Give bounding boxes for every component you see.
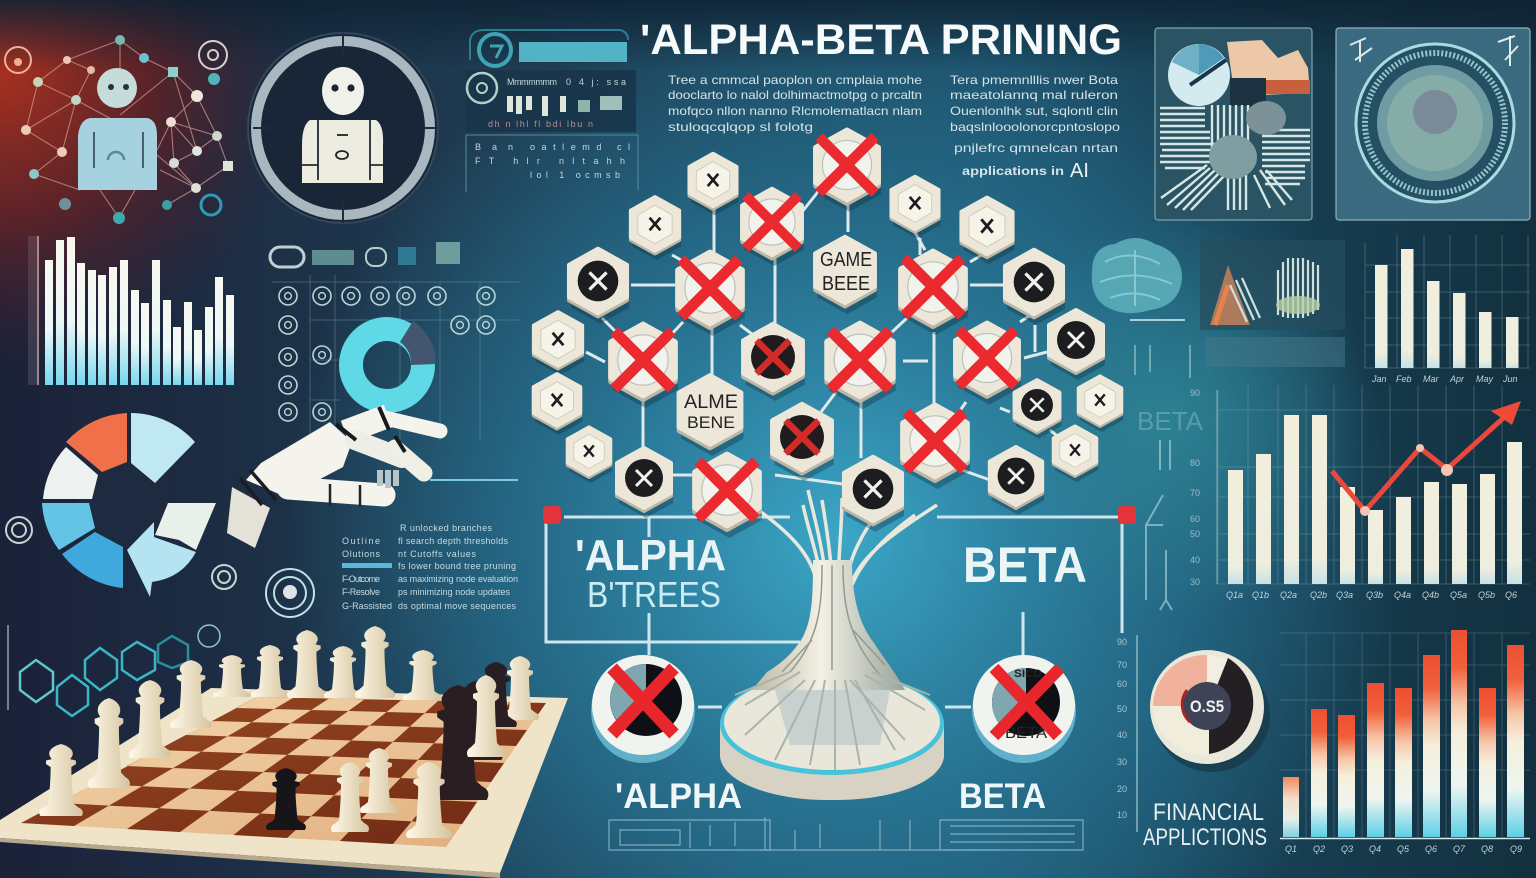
label: beta bottom: BETA — [959, 777, 1046, 816]
red connector markers — [543, 506, 1136, 524]
node — [1049, 310, 1105, 380]
axis labels: Q5b — [1478, 590, 1495, 600]
axis labels: Q3 — [1341, 844, 1353, 854]
axis labels: Feb — [1396, 374, 1412, 384]
axis labels: Q2a — [1280, 590, 1297, 600]
circle icons — [279, 287, 495, 421]
icon: small badges — [6, 517, 314, 617]
axis labels: May — [1476, 374, 1494, 384]
left side of mid-right chart: axis values: 90 — [1190, 388, 1200, 398]
tree base — [720, 670, 944, 800]
heading: financial applications: APPLICTIONS — [1143, 824, 1267, 851]
panel: top centre dashboard — [466, 30, 638, 192]
node — [901, 251, 968, 335]
dashboard labels: lol 1 ocmsb — [530, 170, 620, 180]
chart: segmented ring — [42, 413, 216, 597]
trend arrow — [1332, 401, 1521, 516]
axis labels: Mar — [1423, 374, 1440, 384]
node: alme bene: BENE — [687, 413, 735, 432]
schematic figure — [1146, 440, 1172, 610]
chess board — [0, 688, 568, 878]
dashboard labels: 0 4 j: ssa — [566, 77, 626, 87]
text block: left paragraph: mofqco nllon nanno Rlcmolematlacn nlam — [668, 104, 922, 118]
panel: robot network — [5, 35, 233, 224]
axis: financial scale: 30 — [1117, 757, 1127, 767]
axis labels: Q4a — [1394, 590, 1411, 600]
legend text block: F-Resolve — [342, 587, 380, 597]
legend text block: fs lower bound tree pruning — [398, 561, 516, 571]
text block: right paragraph: maeatolannq mal ruleron — [950, 88, 1118, 102]
legend text block: R unlocked branches — [400, 523, 492, 533]
dashboard labels: B a n — [475, 142, 513, 152]
bar chart: bottom right — [1280, 630, 1530, 854]
text block: right paragraph: Tera pmemnlllis nwer Bota — [950, 73, 1118, 87]
bar chart: top right — [1365, 235, 1530, 384]
legend text block: F-Outcome — [342, 574, 380, 584]
beta token — [972, 655, 1076, 763]
legend text block — [342, 523, 518, 611]
node — [743, 324, 805, 401]
circuit traces — [1160, 105, 1310, 210]
text block: right paragraph: Ouenlonlhk sut, sqlontl clin — [950, 104, 1118, 118]
mini bars — [507, 96, 622, 116]
axis labels: Q6 — [1425, 844, 1437, 854]
node — [567, 427, 612, 483]
legend text block: ds optimal move sequences — [398, 601, 516, 611]
dark pieces — [266, 662, 517, 830]
legend text block: fl search depth thresholds — [398, 536, 508, 546]
left side of mid-right chart: axis values: 50 — [1190, 529, 1200, 539]
axis: financial scale — [1117, 635, 1137, 832]
legend text block: Olutions — [342, 549, 380, 559]
trunk — [752, 560, 905, 690]
text block: right paragraph: applications in — [962, 164, 1064, 178]
legend text block: nt Cutoffs values — [398, 549, 476, 559]
axis: financial scale: 40 — [1117, 730, 1127, 740]
axis labels: Q1 — [1285, 844, 1297, 854]
node: game beee: GAME — [820, 249, 872, 271]
bracket lines — [546, 517, 1122, 707]
axis labels: Q6 — [1505, 590, 1517, 600]
node — [534, 312, 584, 375]
corner glyph marks — [1350, 36, 1518, 66]
label: alpha bottom: 'ALPHA — [615, 777, 742, 816]
node: alme bene: ALME — [684, 392, 738, 413]
front white pieces — [331, 675, 505, 838]
legend text block: G-Rassisted — [342, 601, 392, 611]
axis labels: Jun — [1502, 374, 1518, 384]
node — [891, 177, 941, 238]
node: game beee: BEEE — [822, 273, 870, 295]
dashboard labels: oatlemd cl — [530, 142, 630, 152]
label: beta: BETA — [963, 537, 1087, 593]
panel: icon grid — [270, 242, 520, 440]
robotic hand — [227, 407, 440, 548]
heading: financial applications: FINANCIAL — [1153, 799, 1264, 826]
axis: financial scale: 20 — [1117, 784, 1127, 794]
node — [689, 154, 739, 215]
panel: robot in ring — [248, 33, 438, 223]
bars — [1228, 415, 1522, 584]
peach blob — [1227, 40, 1310, 95]
axis labels: Q2b — [1310, 590, 1327, 600]
axis labels: Q4b — [1422, 590, 1439, 600]
axis labels: Q1b — [1252, 590, 1269, 600]
axis: financial scale: 60 — [1117, 679, 1127, 689]
icon: hexagon chain — [8, 625, 220, 716]
dashboard labels: dh n lhl fl bdi lbu n — [488, 119, 593, 129]
dashboard labels: FT hlr nltahh — [475, 156, 625, 166]
node — [1078, 376, 1123, 432]
gauge: O.S5 — [1190, 697, 1224, 716]
node — [1053, 426, 1098, 482]
panel: brain and sketches — [1092, 238, 1345, 378]
tree trunk and branches — [735, 490, 937, 770]
back row white pieces — [213, 626, 539, 720]
dashboard labels: Mmmmmmm — [507, 77, 557, 87]
axis labels: Q3a — [1336, 590, 1353, 600]
text block: right paragraph: baqslnlooolonorcpntoslopo — [950, 120, 1120, 134]
node — [611, 324, 678, 408]
left side of mid-right chart: axis values: 40 — [1190, 555, 1200, 565]
bar chart: middle right — [1218, 385, 1530, 600]
node: game beee — [815, 237, 877, 314]
axis labels: Q8 — [1481, 844, 1493, 854]
pie — [1168, 44, 1230, 106]
node — [631, 197, 681, 260]
axis labels: Q7 — [1453, 844, 1466, 854]
node — [827, 323, 896, 409]
legend text block: ps minimizing node updates — [398, 587, 510, 597]
gauge — [1150, 650, 1270, 772]
dashboard labels — [475, 77, 630, 180]
robot figure — [78, 68, 157, 190]
axis labels: Q4 — [1369, 844, 1381, 854]
axis labels: Q3b — [1366, 590, 1383, 600]
node — [569, 249, 629, 324]
game tree edges — [586, 188, 1062, 485]
bar chart: left — [28, 236, 234, 385]
chart: teal donut — [351, 321, 436, 401]
node — [772, 404, 834, 481]
icon: ring badges — [5, 41, 227, 215]
axis: financial scale: 70 — [1117, 660, 1127, 670]
node — [534, 374, 582, 435]
label: alpha b'trees — [575, 531, 726, 615]
node — [990, 447, 1044, 515]
axis labels: Jan — [1371, 374, 1387, 384]
alpha token — [591, 655, 695, 763]
node — [678, 252, 745, 336]
axis labels: Q5 — [1397, 844, 1410, 854]
axis labels — [1285, 844, 1522, 854]
panel: circuit image — [1155, 28, 1312, 220]
checker squares — [21, 697, 546, 844]
left side of mid-right chart: axis values: 70 — [1190, 488, 1200, 498]
node — [742, 189, 804, 266]
text block: left paragraph — [668, 73, 922, 134]
panel: circular seal — [1336, 28, 1530, 220]
legend text block: as maximizing node evaluation — [398, 574, 518, 584]
node — [815, 130, 881, 212]
axis labels: Apr — [1449, 374, 1465, 384]
beta token: SICD — [1014, 668, 1042, 680]
game tree nodes — [534, 130, 1123, 538]
legend text block: Outline — [342, 536, 380, 546]
left side of mid-right chart: axis values: 60 — [1190, 514, 1200, 524]
axis labels: Q1a — [1226, 590, 1243, 600]
text block: right paragraph: pnjlefrc qmnelcan nrtan — [954, 141, 1118, 155]
roots — [735, 672, 930, 770]
node — [695, 454, 762, 538]
node: alme bene — [679, 376, 743, 456]
robot figure — [302, 67, 383, 183]
axis: financial scale: 10 — [1117, 810, 1127, 820]
node cluster — [21, 35, 233, 224]
left side of mid-right chart: axis values: 80 — [1190, 458, 1200, 468]
node — [617, 448, 673, 518]
heading: financial applications — [1143, 799, 1267, 851]
label: alpha b'trees: 'ALPHA — [575, 531, 726, 580]
axis labels: Q5a — [1450, 590, 1467, 600]
text block: left paragraph: stuloqcqlqop sl folotg — [668, 120, 813, 134]
node — [961, 198, 1015, 264]
node — [1005, 250, 1065, 325]
axis labels: Q9 — [1510, 844, 1522, 854]
bars — [1283, 630, 1524, 837]
left side of mid-right chart: axis values — [1190, 388, 1217, 587]
axis: financial scale: 90 — [1117, 637, 1127, 647]
node — [1014, 380, 1061, 439]
node — [844, 457, 904, 532]
left side of mid-right chart: axis values: 30 — [1190, 577, 1200, 587]
sketch stripes — [1230, 258, 1318, 322]
title: 'ALPHA-BETA PRINING — [640, 16, 1122, 64]
axis labels: Q2 — [1313, 844, 1325, 854]
bars — [1375, 249, 1518, 368]
bars — [45, 237, 234, 385]
faint beta label: BETA — [1137, 406, 1204, 436]
left side white pieces — [39, 660, 212, 816]
label: alpha b'trees: B'TREES — [587, 574, 721, 615]
header icons — [270, 242, 460, 267]
text block: right paragraph: AI — [1070, 160, 1089, 182]
chess pieces — [39, 626, 539, 838]
blueprint strip — [609, 817, 1083, 850]
beta token: BETA — [1005, 725, 1047, 742]
node — [903, 405, 970, 489]
text block: left paragraph: Tree a cmmcal paoplon on cmplaia mohe — [668, 73, 922, 87]
axis labels — [1371, 374, 1518, 384]
text block: left paragraph: dooclarto lo nalol dolhimactmotpg o prcaltn — [668, 88, 922, 102]
branches — [751, 490, 937, 590]
text block: right paragraph — [950, 73, 1120, 182]
axis: financial scale: 50 — [1117, 704, 1127, 714]
axis labels — [1226, 590, 1517, 600]
node — [955, 323, 1021, 405]
